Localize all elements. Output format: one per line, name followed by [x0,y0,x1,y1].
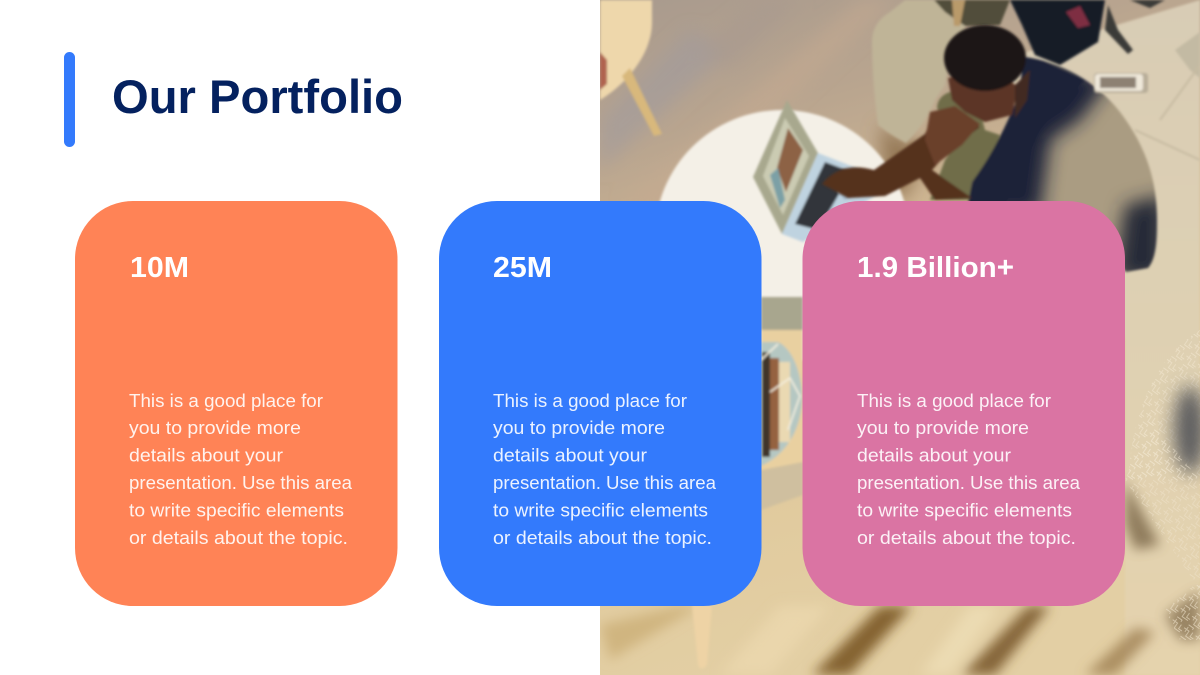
text block: 10M details: to write specific elements [129,500,344,520]
panel: 25M card [439,201,762,606]
text block: 25M details [493,390,717,548]
text block: 1.9 Billion+ details [857,390,1081,548]
backpack [1010,0,1165,65]
text block: 25M details: to write specific elements [493,500,708,520]
title: Our Portfolio [112,70,403,123]
small table and leg [600,0,662,136]
text block: 10M details: This is a good place for [129,390,323,411]
laptop [752,102,875,243]
heading: 25M: 25M [493,252,552,284]
man: legs, arms, body and head [822,25,1165,280]
white round table [655,110,909,362]
text block: 1.9 Billion+ details: presentation. Use this area [857,472,1081,493]
text block: 25M details: This is a good place for [493,390,687,411]
text block: 10M details: presentation. Use this area [129,472,353,493]
text block: 10M details: or details about the topic. [129,527,348,548]
text block: 25M details: details about your [493,444,647,466]
text block: 1.9 Billion+ details: or details about the topic. [857,527,1076,548]
text block: 25M details: you to provide more [493,417,665,438]
ottoman [872,0,1010,143]
rug [1000,0,1200,675]
chair leg [692,606,711,668]
text block: 1.9 Billion+ details: to write specific elements [857,500,1072,520]
heading: 1.9 Billion+: 1.9 Billion+ [857,252,1014,284]
text block: 25M details: or details about the topic. [493,527,712,548]
text block: 10M details: details about your [129,444,283,466]
panel: 10M card [75,201,398,606]
panel: 1.9 Billion+ card [802,201,1125,606]
phone [1094,73,1148,93]
text block: 25M details: presentation. Use this area [493,472,717,493]
text block: 1.9 Billion+ details: details about your [857,444,1011,466]
text block: 10M details: you to provide more [129,417,301,438]
heading: 10M: 10M [130,252,189,284]
seat and chair below table [761,297,803,510]
text block: 10M details [129,390,353,548]
photo: man working on a laptop [600,0,1200,675]
text block: 1.9 Billion+ details: This is a good place for [857,390,1051,411]
text block: 1.9 Billion+ details: you to provide more [857,417,1029,438]
title accent bar [64,52,75,147]
patterned rug and floor at lower right [1125,330,1200,640]
wood floor streaks [600,606,1155,675]
